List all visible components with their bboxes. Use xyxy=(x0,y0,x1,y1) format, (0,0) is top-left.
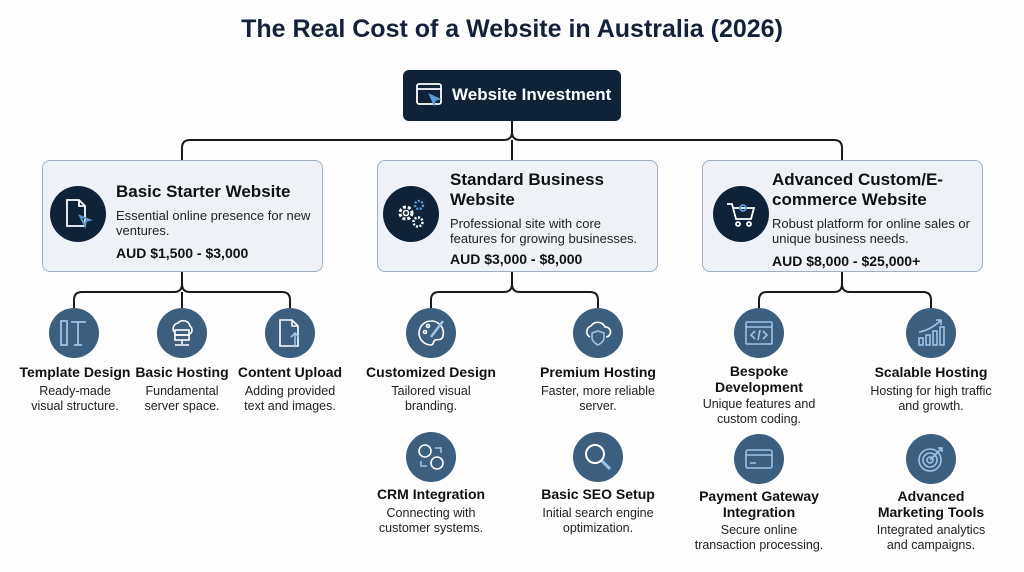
item: payment gateway: transaction processing. xyxy=(695,538,823,552)
item: scalable hosting: and growth. xyxy=(898,399,964,413)
item: CRM integration: Connecting with xyxy=(387,506,475,520)
panel: basic xyxy=(42,160,323,272)
item: basic SEO setup: optimization. xyxy=(563,521,633,535)
item: advanced marketing tools: Marketing Tools xyxy=(878,504,984,520)
panel: standard xyxy=(377,160,658,272)
item: advanced marketing tools xyxy=(877,434,985,552)
panel: standard: features for growing businesses. xyxy=(450,231,637,246)
item: template design xyxy=(20,308,130,413)
item: bespoke development xyxy=(703,308,815,426)
item: template design: visual structure. xyxy=(31,399,119,413)
icon: document cursor xyxy=(50,186,106,242)
icon: browser cursor xyxy=(416,83,442,107)
panel: standard: Website xyxy=(450,190,515,209)
item: content upload: Content Upload xyxy=(238,364,342,380)
item: premium hosting: Faster, more reliable xyxy=(541,384,655,398)
panel: basic: Essential online presence for new xyxy=(116,208,310,223)
item: bespoke development: Bespoke xyxy=(730,363,788,379)
panel: advanced: Advanced Custom/E- xyxy=(772,170,943,189)
panel: basic: AUD $1,500 - $3,000 xyxy=(116,245,248,261)
item: payment gateway: Secure online xyxy=(721,523,797,537)
item: customized design xyxy=(366,308,496,413)
item: customized design: branding. xyxy=(405,399,457,413)
item: basic SEO setup xyxy=(541,432,655,535)
item: basic SEO setup: Basic SEO Setup xyxy=(541,486,655,502)
item: basic hosting xyxy=(135,308,229,413)
panel: advanced: AUD $8,000 - $25,000+ xyxy=(772,253,920,269)
title: The Real Cost of a Website in Australia (2026) xyxy=(241,15,783,43)
icon: gears xyxy=(383,186,439,242)
item: premium hosting: Premium Hosting xyxy=(540,364,656,380)
item: basic hosting: Fundamental xyxy=(146,384,218,398)
item: advanced marketing tools: Advanced xyxy=(898,488,964,504)
panel: standard: Professional site with core xyxy=(450,216,601,231)
item: payment gateway xyxy=(694,434,823,552)
item: template design: Template Design xyxy=(20,364,130,380)
top node: Website Investment: Website Investment xyxy=(452,85,611,104)
item: scalable hosting xyxy=(870,308,992,413)
panel: basic: ventures. xyxy=(116,223,169,238)
panel: basic: Basic Starter Website xyxy=(116,182,290,201)
item: CRM integration: customer systems. xyxy=(379,521,483,535)
panel: advanced xyxy=(702,160,983,272)
panel: standard: AUD $3,000 - $8,000 xyxy=(450,251,582,267)
item: CRM integration xyxy=(377,432,485,535)
icon: cart xyxy=(713,186,769,242)
top node: Website Investment xyxy=(403,70,621,121)
item: CRM integration: CRM Integration xyxy=(377,486,485,502)
item: bespoke development: Development xyxy=(715,379,803,395)
item: advanced marketing tools: and campaigns. xyxy=(887,538,975,552)
item: scalable hosting: Hosting for high traffic xyxy=(870,384,992,398)
item: content upload: text and images. xyxy=(244,399,336,413)
item: premium hosting xyxy=(540,308,656,413)
item: payment gateway: Payment Gateway xyxy=(699,488,819,504)
panel: standard: Standard Business xyxy=(450,170,604,189)
item: advanced marketing tools: Integrated analytics xyxy=(877,523,985,537)
item: customized design: Tailored visual xyxy=(391,384,471,398)
item: basic SEO setup: Initial search engine xyxy=(542,506,654,520)
panel: advanced: unique business needs. xyxy=(772,231,909,246)
item: content upload: Adding provided xyxy=(245,384,335,398)
item: customized design: Customized Design xyxy=(366,364,496,380)
item: premium hosting: server. xyxy=(579,399,617,413)
item: bespoke development: custom coding. xyxy=(717,412,801,426)
panel: advanced: commerce Website xyxy=(772,190,927,209)
panel: advanced: Robust platform for online sales or xyxy=(772,216,970,231)
item: basic hosting: server space. xyxy=(144,399,220,413)
item: content upload xyxy=(238,308,342,413)
item: bespoke development: Unique features and xyxy=(703,397,815,411)
item: template design: Ready-made xyxy=(39,384,111,398)
item: payment gateway: Integration xyxy=(723,504,795,520)
item: scalable hosting: Scalable Hosting xyxy=(875,364,987,380)
item: basic hosting: Basic Hosting xyxy=(135,364,229,380)
